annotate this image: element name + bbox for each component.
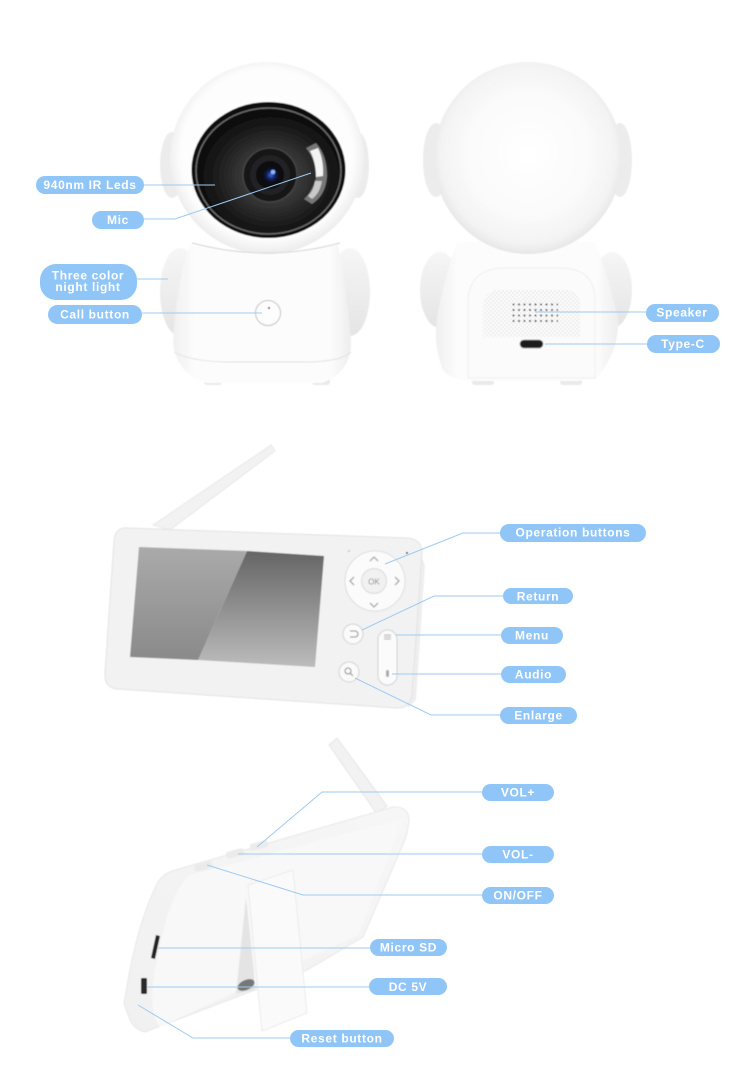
rear raised panel [152, 818, 404, 1027]
enlarge button [339, 662, 359, 682]
back of monitor [124, 738, 409, 1032]
speaker mesh [483, 290, 580, 337]
window reflection [304, 143, 327, 204]
front camera feet [204, 378, 330, 385]
front of monitor [105, 445, 425, 708]
dc port [141, 978, 147, 994]
d-pad [345, 551, 405, 611]
label: VOL+ [482, 784, 554, 801]
front camera head [170, 62, 364, 254]
label: DC 5V: DC 5V [389, 980, 427, 994]
label: VOL- [482, 846, 554, 863]
label: Type-C [647, 335, 720, 353]
d-pad: OK [368, 578, 380, 586]
label: 940nm IR Leds [36, 176, 144, 194]
label: Speaker: Speaker [656, 306, 708, 320]
label: Micro SD: Micro SD [380, 940, 437, 954]
label: Three color night light [40, 264, 137, 300]
back panel [468, 268, 595, 378]
return button [343, 624, 363, 644]
label: Menu: Menu [515, 628, 549, 642]
label: Three color night light: night light [55, 280, 121, 294]
front camera black visor [192, 102, 346, 238]
label: Audio: Audio [515, 668, 552, 682]
back camera ears [423, 123, 632, 197]
label: Return: Return [517, 589, 559, 603]
label: Type-C: Type-C [661, 337, 705, 351]
micro sd slot [151, 935, 160, 959]
call button [256, 300, 280, 326]
type-c port [520, 340, 543, 348]
rear antenna [329, 738, 387, 814]
label: 940nm IR Leds: 940nm IR Leds [43, 178, 137, 192]
screen light half [130, 547, 247, 660]
label: Menu [501, 627, 563, 644]
label: Micro SD [370, 939, 447, 956]
back camera head [434, 62, 622, 254]
label: Three color night light: Three color [52, 268, 124, 282]
label: Mic: Mic [107, 213, 129, 227]
front camera ears [160, 132, 369, 198]
menu and audio button [378, 630, 397, 685]
label: Operation buttons: Operation buttons [515, 526, 631, 540]
top side buttons [194, 840, 269, 872]
front camera neck shadow [192, 243, 340, 253]
back camera feet [472, 376, 582, 385]
label: Audio [501, 666, 566, 683]
front camera [160, 62, 370, 385]
monitor body [105, 528, 422, 708]
label: Call button [48, 305, 142, 324]
kickstand recess [236, 897, 255, 994]
label: Operation buttons [500, 524, 646, 542]
label: VOL-: VOL- [502, 848, 534, 862]
back camera arms [420, 252, 632, 328]
kickstand [248, 870, 307, 1031]
front camera body [173, 245, 351, 383]
label: Mic [92, 211, 144, 229]
label: Call button: Call button [60, 308, 130, 322]
side edge [408, 540, 425, 708]
label: DC 5V [369, 978, 447, 995]
visor inner ring [196, 108, 341, 234]
label: ON/OFF: ON/OFF [493, 888, 543, 902]
front camera arms [160, 248, 370, 336]
label: Reset button: Reset button [301, 1032, 383, 1046]
label: Reset button [290, 1030, 394, 1047]
antenna [153, 445, 275, 530]
label: Speaker [646, 304, 719, 322]
side indicator dots [348, 550, 408, 554]
camera lens [243, 148, 297, 202]
label: VOL+: VOL+ [501, 786, 535, 800]
rear body [124, 807, 409, 1032]
front camera base seam [174, 352, 351, 362]
label: Enlarge [500, 707, 577, 724]
label: Return [503, 588, 573, 604]
leader lines [137, 173, 647, 1038]
back camera [420, 62, 632, 385]
exposed coil [236, 977, 256, 993]
label: Enlarge: Enlarge [514, 708, 563, 722]
screen dark half [198, 551, 324, 667]
label: ON/OFF [482, 887, 554, 904]
back camera body [436, 242, 618, 381]
